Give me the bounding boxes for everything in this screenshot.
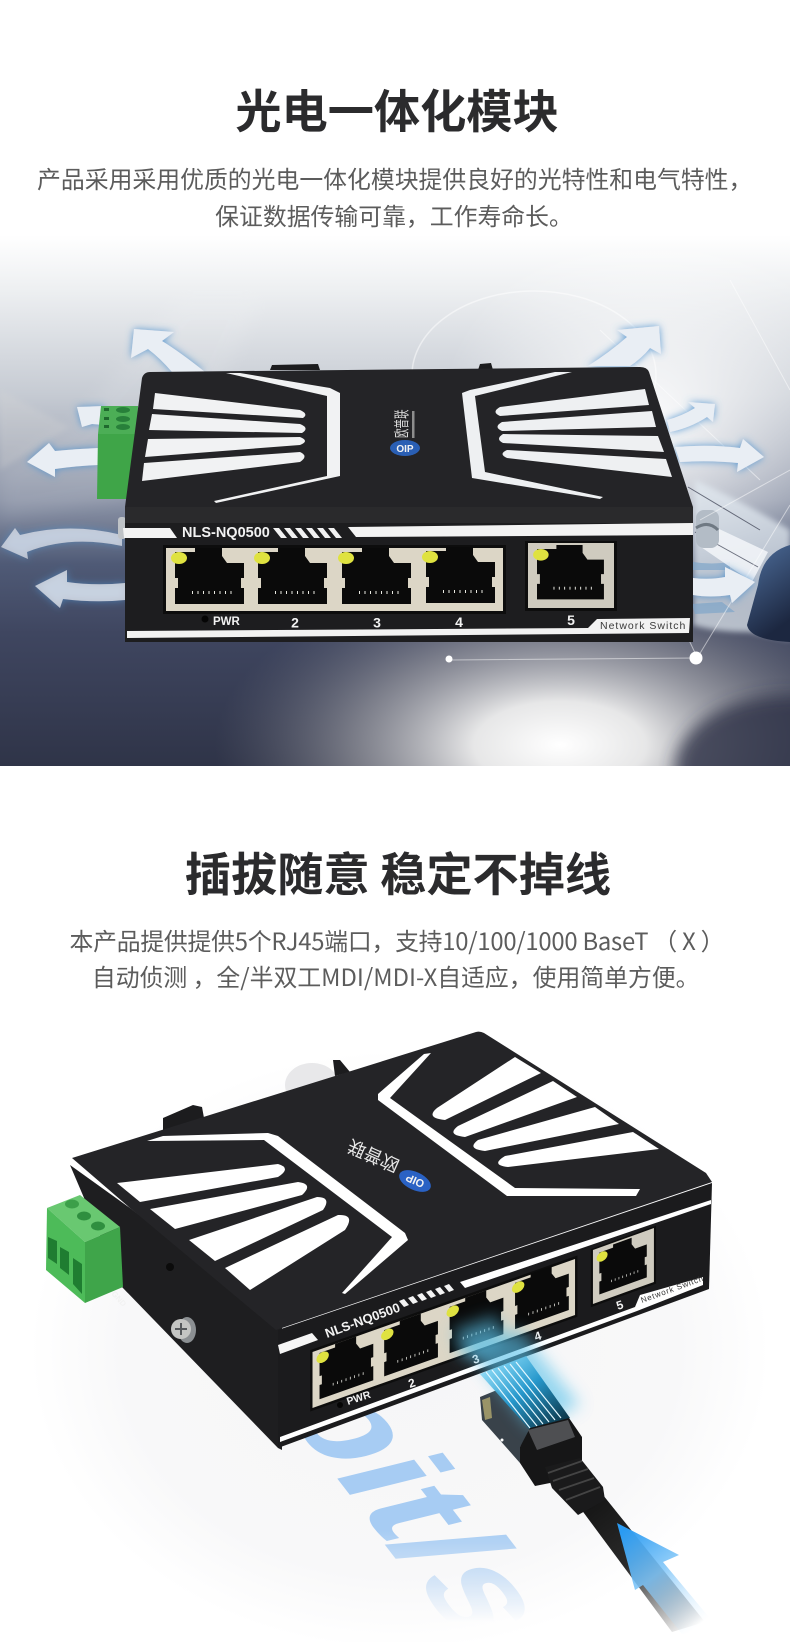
bottom band with Network Switch tag <box>280 1274 705 1442</box>
port labels: 2 <box>406 1375 417 1391</box>
text block: section 2 description: 自动侦测 ，全/半双工MDI/MDI-X自适应，使用简单方便。 <box>92 958 700 993</box>
fold band <box>125 507 693 527</box>
brand logo: OIP <box>396 444 414 455</box>
right white stripes <box>378 1053 659 1196</box>
white disk behind <box>285 1063 339 1107</box>
port labels: 4 <box>532 1328 543 1344</box>
port labels: PWR <box>213 616 241 628</box>
RJ45 ports 1 to 4 <box>310 1255 577 1411</box>
brand logo <box>343 1134 434 1196</box>
transparent head <box>480 1390 533 1463</box>
brand logo: 欧普联 <box>389 409 412 438</box>
bottom band with Network Switch tag <box>127 618 690 638</box>
brand logo: 欧普联 <box>343 1134 403 1179</box>
top face <box>125 367 693 522</box>
port labels <box>337 1297 625 1408</box>
port labels <box>202 612 575 630</box>
arrows: airflow left and right <box>1 326 764 608</box>
GND label: GND <box>110 1289 128 1309</box>
text block: section 1 description: 保证数据传输可靠，工作寿命长。 <box>215 197 573 232</box>
panel: soft grey floor <box>30 1050 770 1642</box>
RJ45 port 5 <box>591 1226 656 1307</box>
cable <box>578 1495 705 1632</box>
text block: section 1 description <box>37 160 752 232</box>
title: section 1: 光电一体化模块 <box>235 75 559 142</box>
RJ45 port 5 <box>525 541 617 611</box>
side face <box>70 1165 282 1450</box>
plug body <box>520 1418 582 1486</box>
strain relief <box>545 1458 605 1515</box>
icon: RJ45 cable and plug <box>465 1330 705 1632</box>
port labels: 2 <box>291 614 299 630</box>
DIN clips <box>163 1060 350 1133</box>
RJ45 ports 1 to 4 <box>163 545 506 614</box>
white band with model name: NLS-NQ0500 <box>323 1300 402 1341</box>
text block: section 1 description: 产品采用采用优质的光电一体化模块提供良好的光特性和电气特性， <box>37 160 752 195</box>
blue glow wires <box>465 1330 580 1430</box>
port labels: 5 <box>614 1297 625 1313</box>
panel: heat dissipation background <box>0 260 790 766</box>
text block: section 2 description <box>70 922 724 993</box>
left white stripes <box>117 1133 408 1294</box>
front face <box>125 523 693 642</box>
white band with model name: NLS-NQ0500 <box>182 525 270 541</box>
port labels: 3 <box>373 614 381 630</box>
blue glow in port 3 <box>453 1315 505 1360</box>
right white stripes <box>462 372 672 499</box>
port labels: 5 <box>567 612 575 628</box>
top face <box>72 1032 712 1330</box>
product photo: angled switch <box>46 1032 712 1450</box>
text block: section 2 description: 本产品提供提供5个RJ45端口，支持10/100/1000 BaseT （ X ） <box>70 922 724 957</box>
light dots <box>446 652 702 664</box>
left white stripes <box>142 373 340 503</box>
green terminal block <box>46 1195 123 1303</box>
port labels: 4 <box>455 614 463 630</box>
brand logo: OIP <box>404 1171 427 1189</box>
port labels: PWR <box>345 1389 373 1408</box>
green terminal block <box>97 406 138 499</box>
arrow: blue data direction <box>617 1523 718 1634</box>
white band with model name <box>278 1200 711 1354</box>
bottom band with Network Switch tag: Network Switch <box>600 620 686 632</box>
port labels: 3 <box>470 1351 481 1367</box>
brand logo <box>389 409 420 456</box>
front face <box>278 1183 712 1448</box>
bottom band with Network Switch tag: Network Switch <box>640 1274 705 1305</box>
side screw <box>118 517 126 539</box>
decorative glass bulb <box>412 280 790 660</box>
title: section 2: 插拔随意 稳定不掉线 <box>185 838 611 905</box>
watermark text: bit/s: bit/s <box>244 1365 595 1642</box>
DIN clips <box>270 363 493 370</box>
product photo: front switch <box>97 363 693 642</box>
white band with model name <box>123 523 693 541</box>
side screw and hole <box>166 1263 196 1343</box>
